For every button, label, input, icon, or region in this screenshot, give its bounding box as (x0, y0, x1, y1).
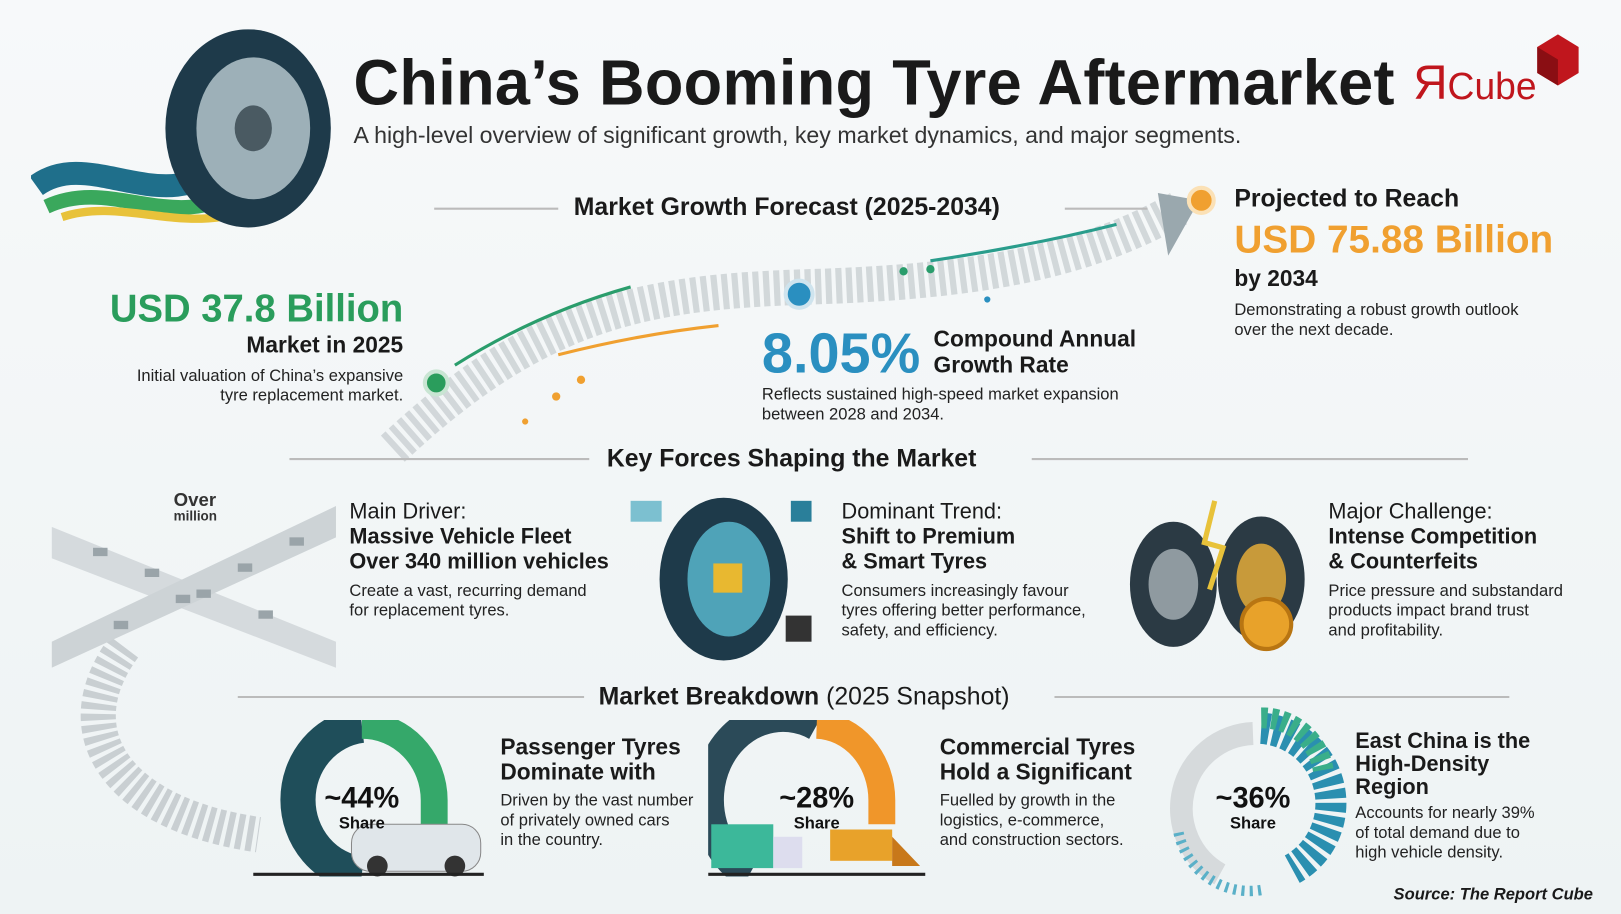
text: 2034 projection: over the next decade. (1234, 321, 1393, 339)
text: commercial tyres (940, 734, 1135, 849)
text: 2034 projection (1234, 185, 1553, 339)
text: 2025 value: USD 37.8 Billion (110, 287, 403, 330)
text: commercial tyres: Hold a Significant (940, 759, 1132, 785)
logo: RCube (1413, 34, 1579, 110)
text: passenger tyres (500, 734, 694, 849)
icon: tyre logo (31, 29, 331, 228)
text: east china: East China is the (1355, 729, 1530, 753)
chart: commercial donut: Share (794, 813, 840, 832)
source: Source: The Report Cube (1394, 886, 1593, 904)
text: major challenge: Intense Competition (1328, 525, 1537, 549)
text: commercial tyres: and construction sectors. (940, 832, 1124, 849)
divider lines (434, 208, 558, 210)
chart: passenger donut: ~44% (324, 782, 399, 815)
text: dominant trend: tyres offering better performance, (842, 602, 1086, 620)
text: major challenge: & Counterfeits (1328, 550, 1478, 574)
text: east china: high vehicle density. (1355, 844, 1503, 862)
text: 2034 projection: by 2034 (1234, 265, 1318, 291)
text: dominant trend: safety, and efficiency. (842, 622, 998, 640)
road curve (393, 193, 1199, 449)
icon: chain and coin (1130, 500, 1305, 652)
text: major challenge: products impact brand trust (1328, 602, 1529, 620)
text: 2034 projection: Projected to Reach (1234, 185, 1459, 213)
heading: growth forecast: Market Growth Forecast (2025-2034) (574, 193, 1000, 221)
text: east china: of total demand due to (1355, 824, 1520, 842)
text: east china: High-Density (1355, 752, 1489, 776)
text: 2025 value: Market in 2025 (246, 332, 403, 358)
chart: passenger donut: Share (339, 813, 385, 832)
text: passenger tyres: Driven by the vast number (500, 792, 693, 810)
text: passenger tyres: in the country. (500, 832, 603, 849)
icon: highway: Over (174, 489, 216, 510)
text: between 2028 and 2034. (762, 406, 944, 424)
text: Growth Rate (934, 352, 1069, 378)
text: commercial tyres: Fuelled by growth in the (940, 792, 1115, 810)
text: 2025 value (110, 287, 403, 405)
text: east china (1355, 729, 1535, 862)
icon: smart tyre (630, 498, 812, 660)
text: 2025 value: Initial valuation of China’s expansive (137, 367, 403, 385)
text: commercial tyres: Commercial Tyres (940, 734, 1135, 760)
chart: east china donut: ~36% (1216, 782, 1291, 815)
text: major challenge (1328, 500, 1563, 640)
text: main driver: Create a vast, recurring demand (349, 582, 587, 600)
dots (425, 371, 448, 394)
icon: highway (52, 489, 336, 668)
text: dominant trend: Shift to Premium (842, 525, 1015, 549)
heading: market breakdown: Market Breakdown (2025 Snapshot) (599, 682, 1010, 711)
text: passenger tyres: of privately owned cars (500, 812, 670, 830)
text: main driver: for replacement tyres. (349, 602, 509, 620)
chart: east china donut: Share (1230, 813, 1276, 832)
chart: commercial donut: ~28% (779, 782, 854, 815)
text: dominant trend: Dominant Trend: (842, 500, 1002, 524)
text: Reflects sustained high-speed market expansion (762, 386, 1119, 404)
chart: commercial donut (708, 720, 926, 876)
text: 2034 projection: USD 75.88 Billion (1234, 217, 1553, 261)
icon: highway: million (174, 509, 217, 524)
text: 2034 projection: Demonstrating a robust growth outlook (1234, 302, 1518, 319)
text: main driver: Main Driver: (349, 500, 466, 524)
text: main driver (349, 500, 609, 620)
text: CAGR (762, 322, 1136, 424)
title: China’s Booming Tyre Aftermarket (354, 47, 1395, 118)
text: main driver: Massive Vehicle Fleet (349, 525, 571, 549)
left tyre track down (98, 647, 258, 835)
text: east china: Accounts for nearly 39% (1355, 804, 1535, 822)
text: major challenge: and profitability. (1328, 622, 1443, 640)
heading: key forces: Key Forces Shaping the Market (607, 444, 976, 473)
text: major challenge: Price pressure and substandard (1328, 582, 1563, 600)
text: east china: Region (1355, 775, 1429, 799)
text: dominant trend: Consumers increasingly favour (842, 582, 1069, 600)
text: passenger tyres: Dominate with (500, 759, 656, 785)
text: commercial tyres: logistics, e-commerce, (940, 812, 1104, 830)
text: major challenge: Major Challenge: (1328, 500, 1493, 524)
text: dominant trend (842, 500, 1086, 640)
text: main driver: Over 340 million vehicles (349, 550, 609, 574)
subtitle: A high-level overview of significant growth, key market dynamics, and major segments. (354, 122, 1241, 148)
text: Compound Annual (934, 326, 1136, 352)
text: 2025 value: tyre replacement market. (220, 387, 403, 405)
text: 8.05% (762, 322, 920, 385)
chart: east china donut (1170, 707, 1346, 896)
chart: passenger donut (253, 720, 484, 876)
text: dominant trend: & Smart Tyres (842, 550, 987, 574)
text: passenger tyres: Passenger Tyres (500, 734, 681, 760)
logo: RCube: ЯCube (1413, 55, 1537, 110)
